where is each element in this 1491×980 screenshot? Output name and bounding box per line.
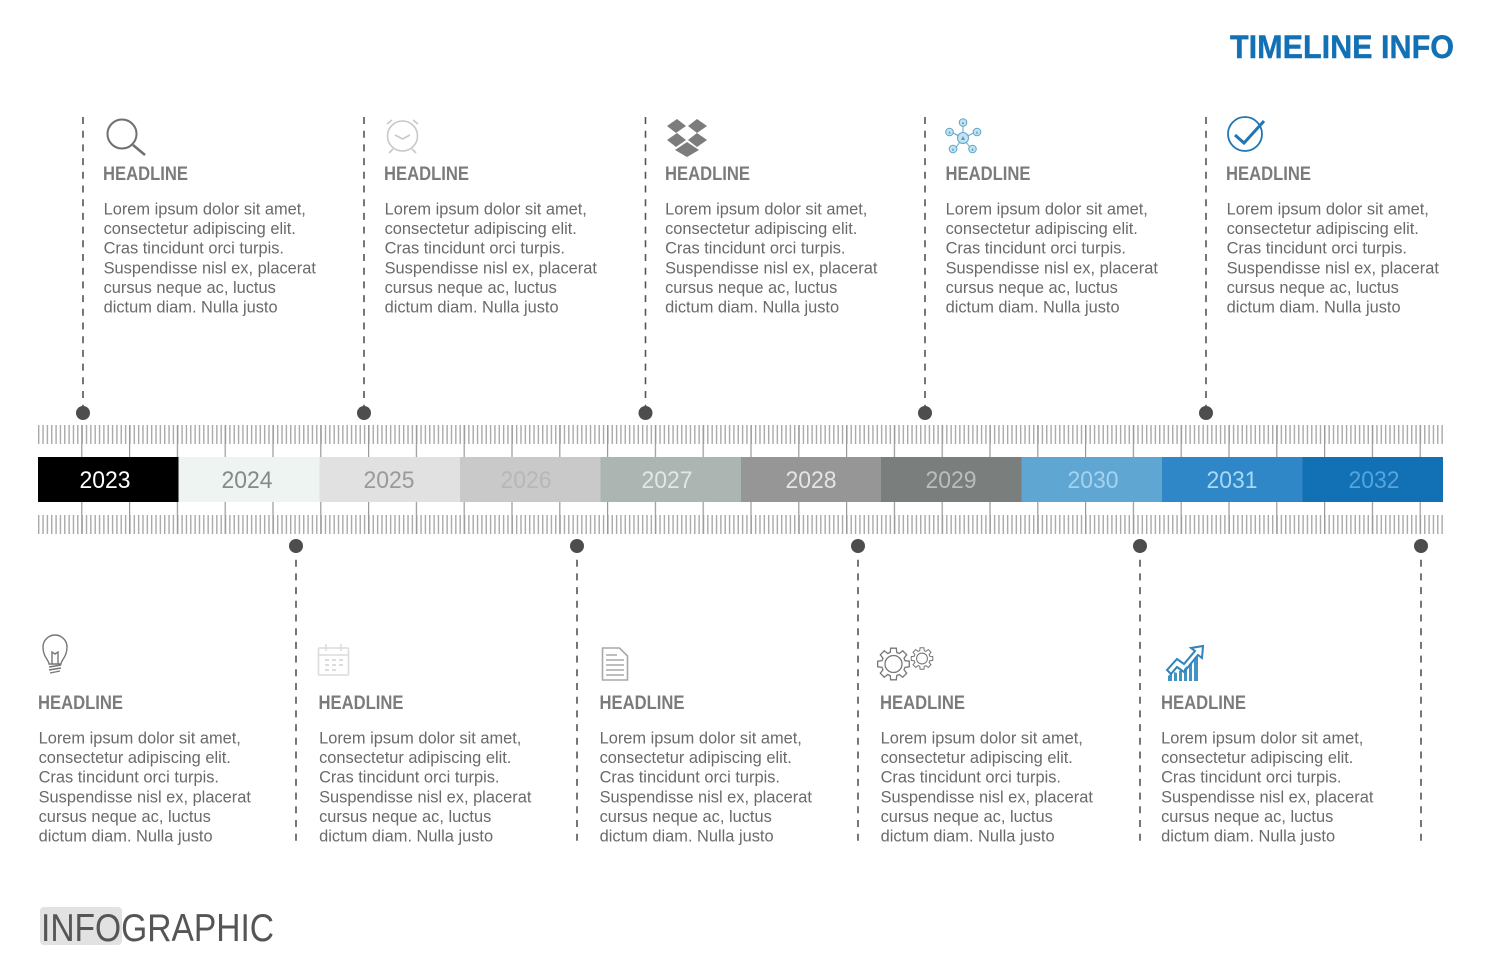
text block 2032: consectetur adipiscing elit. — [1161, 749, 1353, 767]
year 2031 — [1162, 457, 1302, 502]
text block 2029: Lorem ipsum dolor sit amet, — [946, 200, 1148, 218]
text block 2032: Suspendisse nisl ex, placerat — [1161, 788, 1374, 806]
year 2032: 2032 — [1348, 467, 1400, 494]
heading 2027: HEADLINE — [665, 164, 750, 185]
text block 2024: cursus neque ac, luctus — [39, 808, 211, 826]
icon: document — [602, 648, 628, 680]
panel: 2028 milestone — [600, 539, 865, 846]
text block 2029: Suspendisse nisl ex, placerat — [946, 259, 1158, 277]
year 2029 — [881, 457, 1022, 502]
connector 2030 — [1133, 539, 1147, 842]
year 2025: 2025 — [364, 467, 414, 494]
panel: 2029 milestone — [918, 117, 1158, 420]
text block 2024: Cras tincidunt orci turpis. — [39, 769, 219, 787]
text block 2025: dictum diam. Nulla justo — [385, 299, 559, 317]
year 2029: 2029 — [926, 467, 976, 494]
connector 2027 — [638, 117, 652, 420]
year 2023: 2023 — [80, 467, 130, 494]
year 2025 — [320, 457, 460, 502]
icon: light bulb — [43, 635, 67, 673]
icon: magnifier — [108, 120, 145, 155]
icon: growth chart — [1167, 646, 1203, 681]
heading 2031: HEADLINE — [1226, 164, 1311, 185]
heading 2023: HEADLINE — [103, 164, 188, 185]
icon: people network — [946, 119, 981, 153]
panel: 2026 milestone — [318, 539, 584, 846]
year 2032 — [1302, 457, 1443, 502]
text block 2024: consectetur adipiscing elit. — [39, 749, 231, 767]
text block 2026: Suspendisse nisl ex, placerat — [319, 788, 532, 806]
panel: 2025 milestone — [357, 117, 597, 420]
text block 2029: dictum diam. Nulla justo — [946, 299, 1120, 317]
year 2027 — [600, 457, 741, 502]
connector 2023 — [76, 117, 90, 420]
text block 2025: Suspendisse nisl ex, placerat — [385, 259, 597, 277]
year 2026: 2026 — [500, 467, 552, 494]
year 2028: 2028 — [786, 467, 836, 494]
text block 2025: cursus neque ac, luctus — [385, 279, 557, 297]
text block 2028: consectetur adipiscing elit. — [600, 749, 792, 767]
text block 2023: dictum diam. Nulla justo — [104, 299, 278, 317]
text block 2030: Lorem ipsum dolor sit amet, — [881, 729, 1083, 747]
text block 2025: Cras tincidunt orci turpis. — [385, 240, 565, 258]
text block 2023: Lorem ipsum dolor sit amet, — [104, 200, 306, 218]
panel: 2030 milestone — [878, 539, 1147, 846]
panel: 2027 milestone — [638, 117, 878, 420]
text block 2027: Lorem ipsum dolor sit amet, — [665, 200, 867, 218]
year 2024: 2024 — [222, 467, 272, 494]
heading 2029: HEADLINE — [946, 164, 1030, 185]
text block 2029: consectetur adipiscing elit. — [946, 220, 1138, 238]
text block 2027: dictum diam. Nulla justo — [665, 299, 839, 317]
panel: 2031 milestone — [1199, 117, 1439, 420]
footer label: infographic: INFOGRAPHIC — [41, 907, 274, 950]
icon: open box — [667, 119, 707, 157]
text block 2031: Suspendisse nisl ex, placerat — [1227, 259, 1439, 277]
icon: alarm clock — [387, 120, 418, 153]
year 2030: 2030 — [1068, 467, 1118, 494]
text block 2023: Suspendisse nisl ex, placerat — [104, 259, 316, 277]
text block 2029: Cras tincidunt orci turpis. — [946, 240, 1126, 258]
text block 2025: Lorem ipsum dolor sit amet, — [385, 200, 587, 218]
timeline year bar — [38, 457, 1443, 502]
text block 2023: consectetur adipiscing elit. — [104, 220, 296, 238]
connector 2024 — [289, 539, 303, 842]
year 2031: 2031 — [1206, 467, 1258, 494]
text block 2028: Cras tincidunt orci turpis. — [600, 769, 780, 787]
connector 2032 — [1414, 539, 1428, 842]
text block 2026: consectetur adipiscing elit. — [319, 749, 511, 767]
heading 2026: HEADLINE — [318, 693, 404, 714]
text block 2031: cursus neque ac, luctus — [1227, 279, 1399, 297]
text block 2027: cursus neque ac, luctus — [665, 279, 837, 297]
text block 2029: cursus neque ac, luctus — [946, 279, 1118, 297]
text block 2032: Cras tincidunt orci turpis. — [1161, 769, 1341, 787]
text block 2030: cursus neque ac, luctus — [881, 808, 1053, 826]
heading 2025: HEADLINE — [384, 164, 469, 185]
panel: 2024 milestone — [38, 539, 303, 846]
text block 2027: Suspendisse nisl ex, placerat — [665, 259, 878, 277]
heading 2028: HEADLINE — [600, 693, 684, 714]
year 2023 — [38, 457, 178, 502]
heading 2030: HEADLINE — [880, 693, 965, 714]
text block 2031: consectetur adipiscing elit. — [1227, 220, 1419, 238]
text block 2027: consectetur adipiscing elit. — [665, 220, 857, 238]
connector 2025 — [357, 117, 371, 420]
text block 2031: Lorem ipsum dolor sit amet, — [1227, 200, 1429, 218]
text block 2026: cursus neque ac, luctus — [319, 808, 491, 826]
text block 2031: dictum diam. Nulla justo — [1227, 299, 1401, 317]
text block 2032: dictum diam. Nulla justo — [1161, 828, 1335, 846]
text block 2030: consectetur adipiscing elit. — [881, 749, 1073, 767]
panel: 2032 milestone — [1161, 539, 1428, 846]
year 2024 — [178, 457, 320, 502]
title: TIMELINE INFO — [1230, 29, 1454, 65]
text block 2024: dictum diam. Nulla justo — [39, 828, 213, 846]
text block 2023: cursus neque ac, luctus — [104, 279, 276, 297]
year 2026 — [460, 457, 600, 502]
heading 2032: HEADLINE — [1161, 693, 1246, 714]
text block 2028: Lorem ipsum dolor sit amet, — [600, 729, 802, 747]
icon: calendar — [318, 644, 348, 675]
text block 2027: Cras tincidunt orci turpis. — [665, 240, 845, 258]
connector 2028 — [851, 539, 865, 842]
text block 2031: Cras tincidunt orci turpis. — [1227, 240, 1407, 258]
icon: check mark — [1228, 117, 1264, 151]
text block 2028: Suspendisse nisl ex, placerat — [600, 788, 812, 806]
icon: gears — [878, 648, 933, 680]
text block 2030: dictum diam. Nulla justo — [881, 828, 1055, 846]
panel: 2023 milestone — [76, 117, 316, 420]
text block 2024: Lorem ipsum dolor sit amet, — [39, 729, 241, 747]
connector 2031 — [1199, 117, 1213, 420]
connector 2026 — [570, 539, 584, 842]
text block 2026: Cras tincidunt orci turpis. — [319, 769, 499, 787]
text block 2026: Lorem ipsum dolor sit amet, — [319, 729, 521, 747]
text block 2028: cursus neque ac, luctus — [600, 808, 772, 826]
year 2030 — [1022, 457, 1162, 502]
text block 2032: Lorem ipsum dolor sit amet, — [1161, 729, 1363, 747]
text block 2028: dictum diam. Nulla justo — [600, 828, 774, 846]
text block 2026: dictum diam. Nulla justo — [319, 828, 493, 846]
year 2028 — [741, 457, 881, 502]
connector 2029 — [918, 117, 932, 420]
text block 2032: cursus neque ac, luctus — [1161, 808, 1333, 826]
year 2027: 2027 — [642, 467, 692, 494]
timeline ruler — [38, 425, 1443, 534]
text block 2023: Cras tincidunt orci turpis. — [104, 240, 284, 258]
text block 2025: consectetur adipiscing elit. — [385, 220, 577, 238]
text block 2030: Suspendisse nisl ex, placerat — [881, 788, 1093, 806]
text block 2024: Suspendisse nisl ex, placerat — [39, 788, 251, 806]
heading 2024: HEADLINE — [38, 693, 123, 714]
text block 2030: Cras tincidunt orci turpis. — [881, 769, 1061, 787]
